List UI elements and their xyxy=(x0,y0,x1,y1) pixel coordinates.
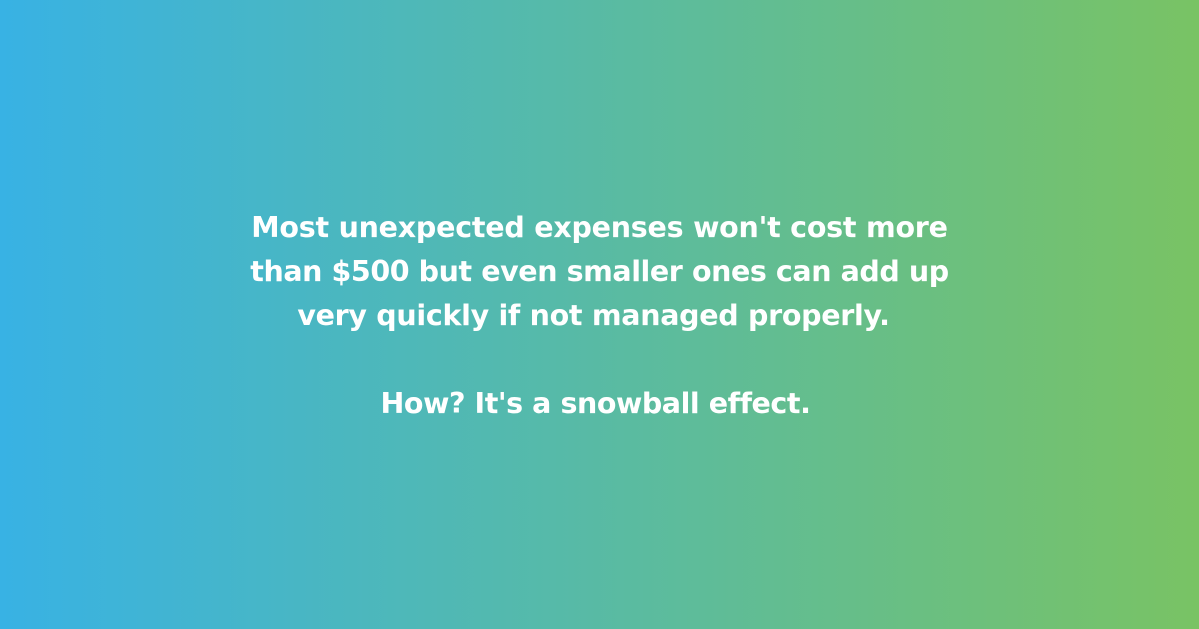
main message text: than $500 but even smaller ones can add up xyxy=(250,255,949,288)
main message text: Most unexpected expenses won't cost more xyxy=(251,211,948,244)
main message text: very quickly if not managed properly. xyxy=(297,299,890,332)
main message text: How? It's a snowball effect. xyxy=(381,387,810,420)
